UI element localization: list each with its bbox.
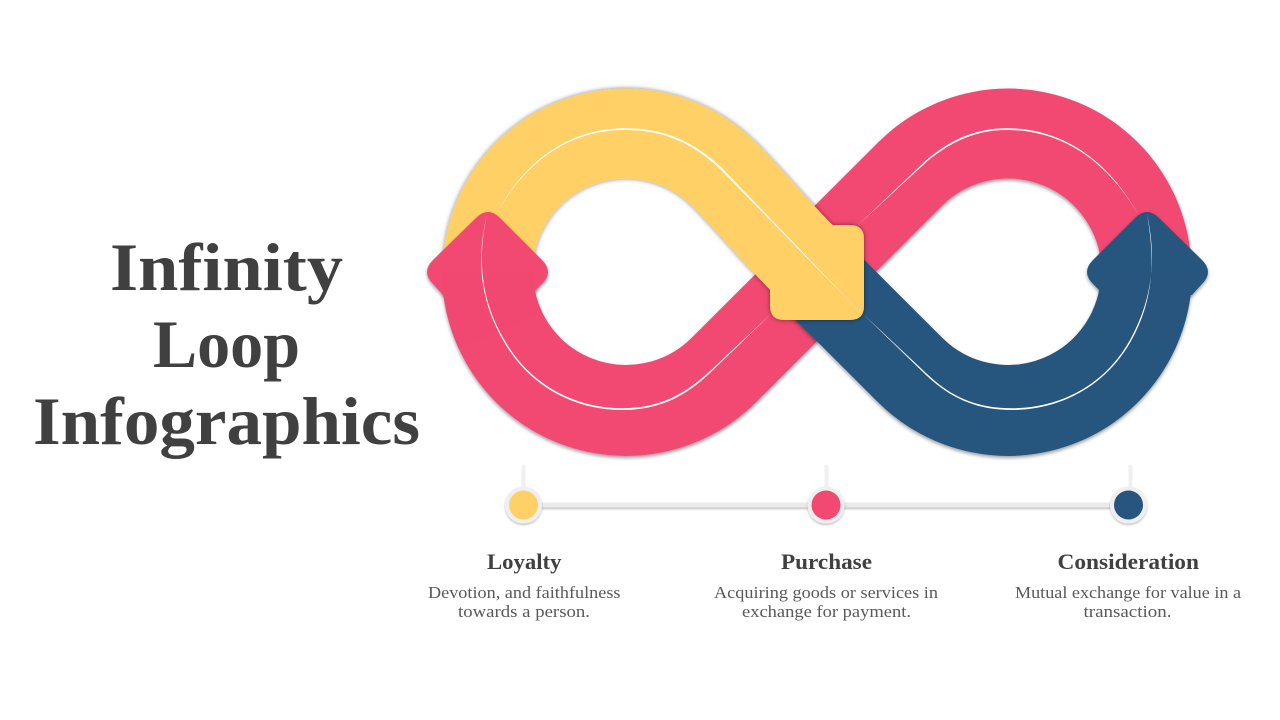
- title: Infinity: [110, 229, 343, 305]
- text block: Consideration: [1015, 549, 1241, 621]
- timeline: [505, 465, 1147, 524]
- text block: Loyalty: Loyalty: [487, 549, 562, 574]
- title: Infographics: [33, 383, 420, 459]
- pink band: upper right loop: [817, 134, 1146, 272]
- text block: Purchase: Purchase: [781, 549, 872, 574]
- yellow arrow: upper left loop ending at the crossing: [488, 134, 864, 320]
- title: [33, 229, 420, 459]
- timeline connector: [523, 502, 1128, 508]
- white line: pink upper band: [856, 128, 1138, 227]
- marker: pink: [808, 465, 844, 524]
- text block: Consideration: Consideration: [1058, 549, 1199, 574]
- text block: Loyalty: Devotion, and faithfulness: [428, 583, 620, 602]
- infinity loop diagram: [427, 128, 1208, 410]
- text block: Purchase: exchange for payment.: [742, 602, 911, 621]
- text block: Consideration: transaction.: [1084, 602, 1172, 621]
- text block: Loyalty: towards a person.: [458, 602, 590, 621]
- white line: yellow band: [497, 128, 861, 313]
- white line: pink lower band: [481, 214, 772, 410]
- pink arrowhead: [427, 212, 548, 330]
- marker: blue: [1110, 465, 1147, 524]
- white line: blue band: [862, 214, 1152, 410]
- blue band: lower right loop: [815, 272, 1146, 410]
- blue arrowhead: [1087, 212, 1208, 330]
- text block: Loyalty: [428, 549, 620, 621]
- text block: Consideration: Mutual exchange for value in a: [1015, 583, 1241, 602]
- text block: Purchase: Acquiring goods or services in: [714, 583, 939, 602]
- pink band: lower left loop: [488, 272, 817, 410]
- marker: yellow: [505, 465, 542, 524]
- title: Loop: [153, 306, 300, 382]
- text block: Purchase: [714, 549, 939, 621]
